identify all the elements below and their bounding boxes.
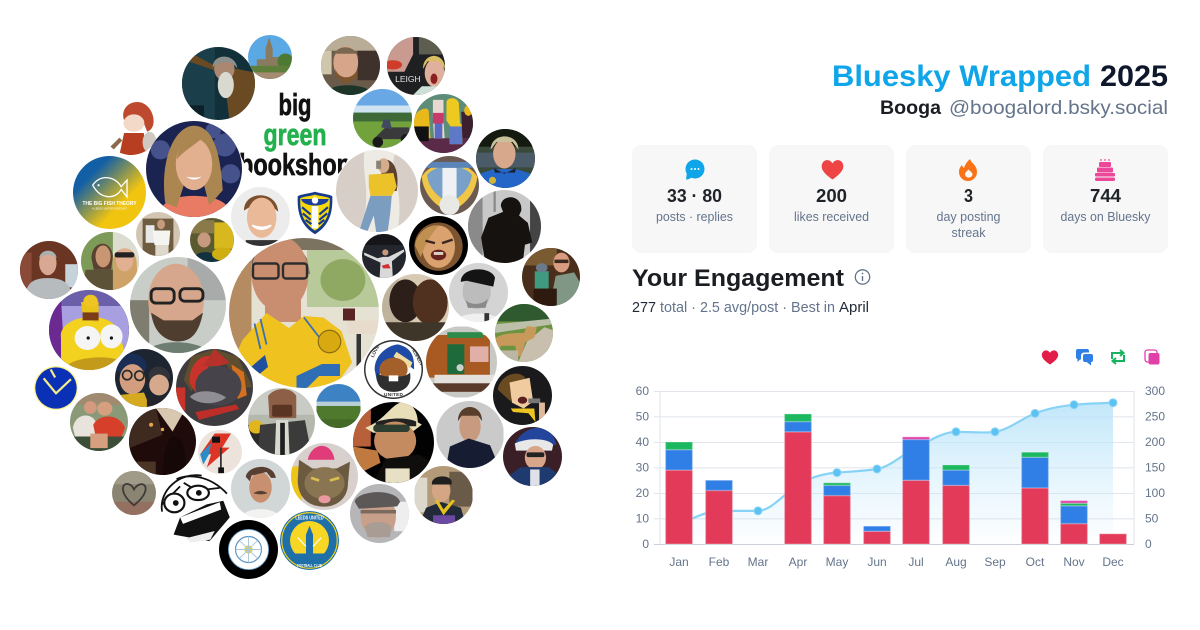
stat card: day posting streak: 3: [964, 186, 973, 206]
avatar: cathedral: [248, 35, 292, 79]
avatar: big green bookshop logo: green: [264, 117, 326, 152]
avatar: big green bookshop logo: big: [278, 87, 312, 122]
icon: legend replies: [1076, 349, 1093, 366]
avatar: Leeds United football club badge: [280, 511, 339, 570]
month labels: Oct: [1026, 555, 1045, 569]
right axis labels: 200: [1145, 435, 1165, 449]
stat card: days on Bluesky: days on Bluesky: [1060, 210, 1151, 224]
avatar: Leeds blue smiley: [34, 366, 78, 410]
avatar: grey-haired man in blue shirt: [476, 129, 535, 188]
engagement summary: total · 2.5 avg/post · Best in: [660, 300, 835, 316]
left axis labels: 10: [636, 512, 649, 526]
month labels: Dec: [1102, 555, 1124, 569]
avatar: man in black cap, monochrome: [449, 263, 508, 322]
avatar: old man with model: [522, 248, 580, 306]
month labels: Jun: [867, 555, 887, 569]
month labels: Nov: [1063, 555, 1085, 569]
avatar: rage comic face: [160, 474, 230, 542]
avatar: big fish theory logo: A LEEDS UNITED PODCAST: [92, 206, 127, 210]
avatar: dark street at dusk: [129, 408, 196, 475]
avatar: big fish theory logo: THE BIG FISH THEORY: [82, 201, 137, 207]
avatar: Love Respect United badge: [364, 340, 423, 399]
right axis labels: 50: [1145, 512, 1159, 526]
month labels: Jul: [908, 555, 924, 569]
avatar: girl in yellow shirt mirror selfie: [336, 150, 418, 232]
avatar: cocker spaniels: [382, 274, 449, 341]
stat card: day posting streak: day posting: [936, 210, 1001, 224]
avatar: Yorkshire rose black ring: [219, 520, 278, 579]
user name and handle: @boogalord.bsky.social: [949, 97, 1168, 119]
month labels: Aug: [945, 555, 967, 569]
month labels: Jan: [669, 555, 689, 569]
stat card: day posting streak: streak: [952, 226, 986, 240]
stat card: posts and replies: [632, 145, 757, 253]
avatar: man in flat cap: [350, 484, 409, 543]
left axis labels: 60: [636, 384, 649, 398]
title: 2025: [1100, 60, 1168, 93]
avatar: blonde woman: [146, 121, 242, 217]
avatar: footballer celebrating: [362, 234, 406, 278]
avatar: platypus cartoon: [176, 349, 253, 426]
month labels: Apr: [789, 555, 807, 569]
avatar: LEIGH poster with blonde woman: [387, 37, 445, 95]
title: Bluesky Wrapped: [832, 60, 1091, 93]
left axis labels: 50: [636, 410, 649, 424]
avatar: heart on brick wall: [112, 471, 156, 515]
left axis labels: [636, 384, 649, 551]
avatar: man in santa hat: [503, 427, 562, 486]
avatar: crowd selfie: [190, 218, 234, 262]
avatar: man with medal: [414, 466, 473, 524]
avatar: smiling man: [231, 187, 290, 246]
avatar: grimacing woman in black ring: [409, 216, 468, 275]
cumulative line: [679, 403, 1113, 524]
avatar: couple in red shirt: [70, 393, 128, 451]
cumulative points: [675, 399, 1117, 528]
panel: avatar bubble cloud: [20, 35, 580, 579]
stat card: days on Bluesky: 744: [1090, 186, 1121, 206]
month labels: [669, 555, 1124, 569]
icon: flame: [959, 159, 977, 181]
avatar: Leeds crest badge: [298, 192, 332, 234]
icon: heart: [822, 160, 843, 180]
avatar: Bowie lightning bolt: [198, 430, 242, 474]
stat card: posts and replies: 33 · 80: [667, 186, 722, 206]
icon: legend quotes: [1145, 350, 1160, 364]
avatar: ginger-bearded man: [321, 36, 380, 95]
month labels: Sep: [984, 555, 1006, 569]
cumulative area: [679, 403, 1113, 544]
avatar: man in panama hat and sunglasses: [353, 402, 434, 483]
icon: legend heart: [1042, 350, 1058, 364]
right axis labels: 300: [1145, 384, 1165, 398]
avatar: golf course field: [316, 384, 361, 428]
avatar: Leeds United football club badge: LEEDS UNITED: [295, 515, 324, 521]
icon: info: [855, 270, 870, 284]
avatar: bearded man in painting: [182, 47, 255, 120]
avatar: tabby cat with party hat: [291, 443, 358, 510]
avatar: black silhouette in doorway: [468, 190, 541, 263]
chart legend icons: [1042, 349, 1160, 366]
avatar: man in dark shirt: [436, 401, 504, 468]
engagement summary: April: [839, 300, 869, 316]
right axis labels: 100: [1145, 486, 1165, 500]
right axis labels: [1145, 384, 1165, 551]
user name and handle: Booga: [880, 98, 941, 119]
icon: legend reposts: [1112, 350, 1124, 364]
stat card: day posting streak: [906, 145, 1031, 253]
stacked bars: [666, 414, 1126, 544]
avatar: LUFC crest clock: [420, 156, 479, 215]
month labels: May: [826, 555, 848, 569]
avatar: man with football shirt: [136, 212, 180, 256]
avatar: Leeds United football club badge: FOOTBALL CLUB: [297, 563, 322, 568]
right axis labels: 150: [1145, 460, 1165, 474]
avatar: Lego log cabin: [426, 326, 497, 398]
right axis labels: 250: [1145, 410, 1165, 424]
chart: monthly engagement stacked bars with cumulative line: [636, 384, 1165, 569]
month labels: Mar: [748, 555, 768, 569]
avatar: big fish theory logo: [73, 156, 146, 229]
avatar: chibi red-haired warrior: [110, 102, 156, 155]
avatar: cartoon man with microphone: [493, 366, 552, 425]
left axis labels: 0: [642, 537, 649, 551]
avatar: Simpsons scene: [414, 94, 473, 153]
right axis labels: 0: [1145, 537, 1152, 551]
stat card: likes received: [769, 145, 894, 253]
avatar: Love Respect United badge: UNITED: [384, 392, 404, 397]
avatar: two women: [81, 232, 139, 290]
stat card: days on Bluesky: [1043, 145, 1168, 253]
avatar: motorbike in countryside: [353, 89, 412, 148]
engagement summary: 277: [632, 300, 656, 316]
avatar: bald man with glasses: [130, 257, 226, 353]
icon: chat bubble: [686, 160, 704, 180]
avatar: big green bookshop logo: [239, 87, 351, 182]
avatar: two people in hats: [115, 349, 173, 407]
left axis labels: 20: [636, 486, 649, 500]
stat card: likes received: likes received: [794, 210, 869, 224]
stat card: likes received: 200: [816, 186, 847, 206]
left axis labels: 40: [636, 435, 649, 449]
left axis labels: 30: [636, 460, 649, 474]
stat card: posts and replies: posts · replies: [656, 210, 733, 224]
avatar: main user in yellow Leeds shirt: [229, 238, 379, 388]
avatar: golden retriever on path: [495, 304, 553, 362]
avatar: LEIGH poster with blonde woman: LEIGH: [395, 74, 421, 84]
month labels: Feb: [709, 555, 730, 569]
avatar: Lego man in suit: [248, 388, 315, 455]
avatar: Homer Simpson cartoon: [49, 290, 129, 370]
avatar: man in grey t-shirt: [20, 241, 78, 299]
avatar: Love Respect United badge: LOVE: [370, 344, 380, 358]
avatar: young man in white t-shirt: [231, 459, 290, 518]
heading: Your Engagement: Your Engagement: [632, 265, 844, 292]
icon: birthday cake: [1095, 159, 1115, 181]
